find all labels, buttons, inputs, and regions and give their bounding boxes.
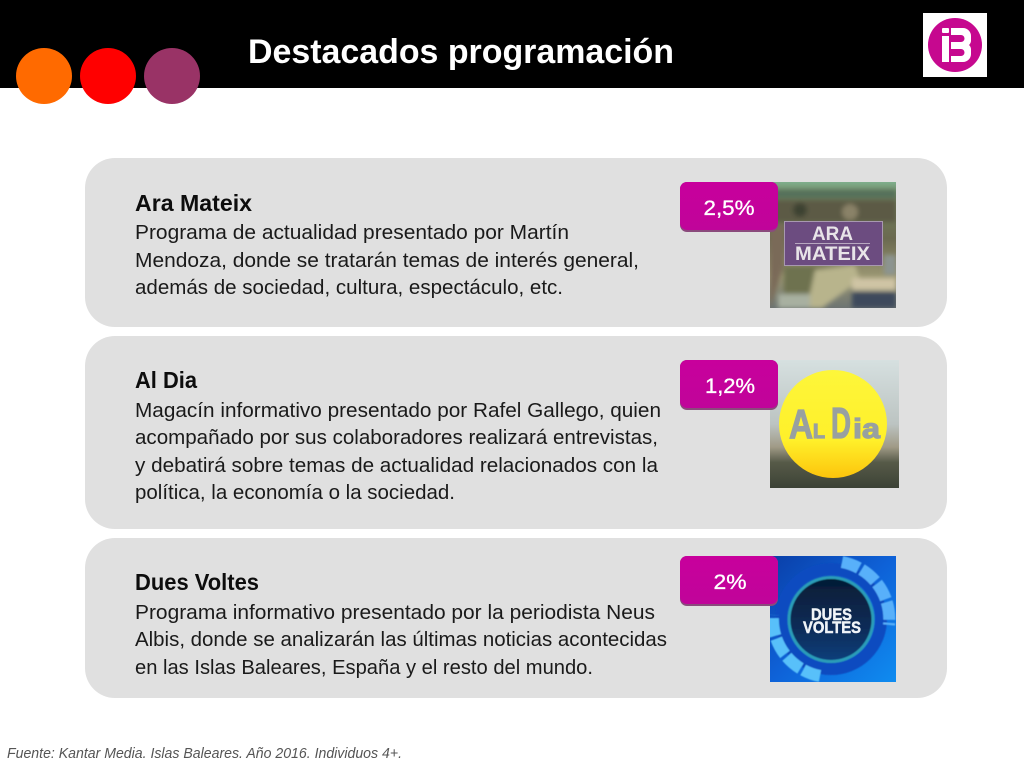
panel: Dues Voltes [85,538,947,698]
description: Al Dia: Magacín informativo presentado por Rafel Gallego, quien [135,399,661,422]
image: Al Dia thumbnail [770,360,899,488]
decorative circles [16,48,200,104]
badge: 2,5%: 2,5% [704,197,754,220]
heading: Ara Mateix: Ara Mateix [135,190,252,216]
description: Al Dia [135,399,661,504]
icon: IB3 logo [923,13,987,77]
description: Al Dia: acompañado por sus colaboradores realizará entrevistas, [135,426,658,449]
badge: 1,2% [680,360,778,410]
panel: Al Dia [85,336,947,529]
badge: 2%: 2% [714,571,746,594]
source footnote: Fuente: Kantar Media. Islas Baleares. Año 2016. Individuos 4+. [7,746,402,762]
image: Ara Mateix thumbnail: ARA [812,224,853,245]
description: Dues Voltes: en las Islas Baleares, España y el resto del mundo. [135,656,593,679]
image: Al Dia thumbnail: ia [853,413,880,444]
image: Ara Mateix thumbnail: MATEIX [795,244,870,265]
description: Al Dia: y debatirá sobre temas de actualidad relacionados con la [135,454,659,477]
image: Dues Voltes thumbnail: VOLTES [803,618,861,637]
description: Ara Mateix: Mendoza, donde se tratarán temas de interés general, [135,249,639,272]
description: Ara Mateix: además de sociedad, cultura, espectáculo, etc. [135,276,563,299]
description: Al Dia: política, la economía o la sociedad. [135,481,455,504]
title: Destacados programación [248,33,674,71]
description: Dues Voltes: Programa informativo presentado por la periodista Neus [135,601,655,624]
image: Dues Voltes thumbnail: DUES [811,605,852,624]
heading: Dues Voltes: Dues Voltes [135,569,259,595]
image: Al Dia thumbnail: D [831,399,851,448]
header bar [0,0,1024,88]
badge: 2% [680,556,778,606]
heading: Al Dia: Al Dia [135,367,197,393]
description: Dues Voltes: Albis, donde se analizarán las últimas noticias acontecidas [135,628,667,651]
panel: Ara Mateix [85,158,947,327]
image: Al Dia thumbnail: L [813,421,825,443]
description: Ara Mateix [135,221,639,299]
image: Al Dia thumbnail: A [789,401,813,447]
badge: 2,5% [680,182,778,232]
description: Dues Voltes [135,601,667,679]
description: Ara Mateix: Programa de actualidad presentado por Martín [135,221,569,244]
image: Dues Voltes thumbnail [770,556,896,682]
badge: 1,2%: 1,2% [705,375,755,398]
image: Ara Mateix thumbnail [770,182,896,308]
